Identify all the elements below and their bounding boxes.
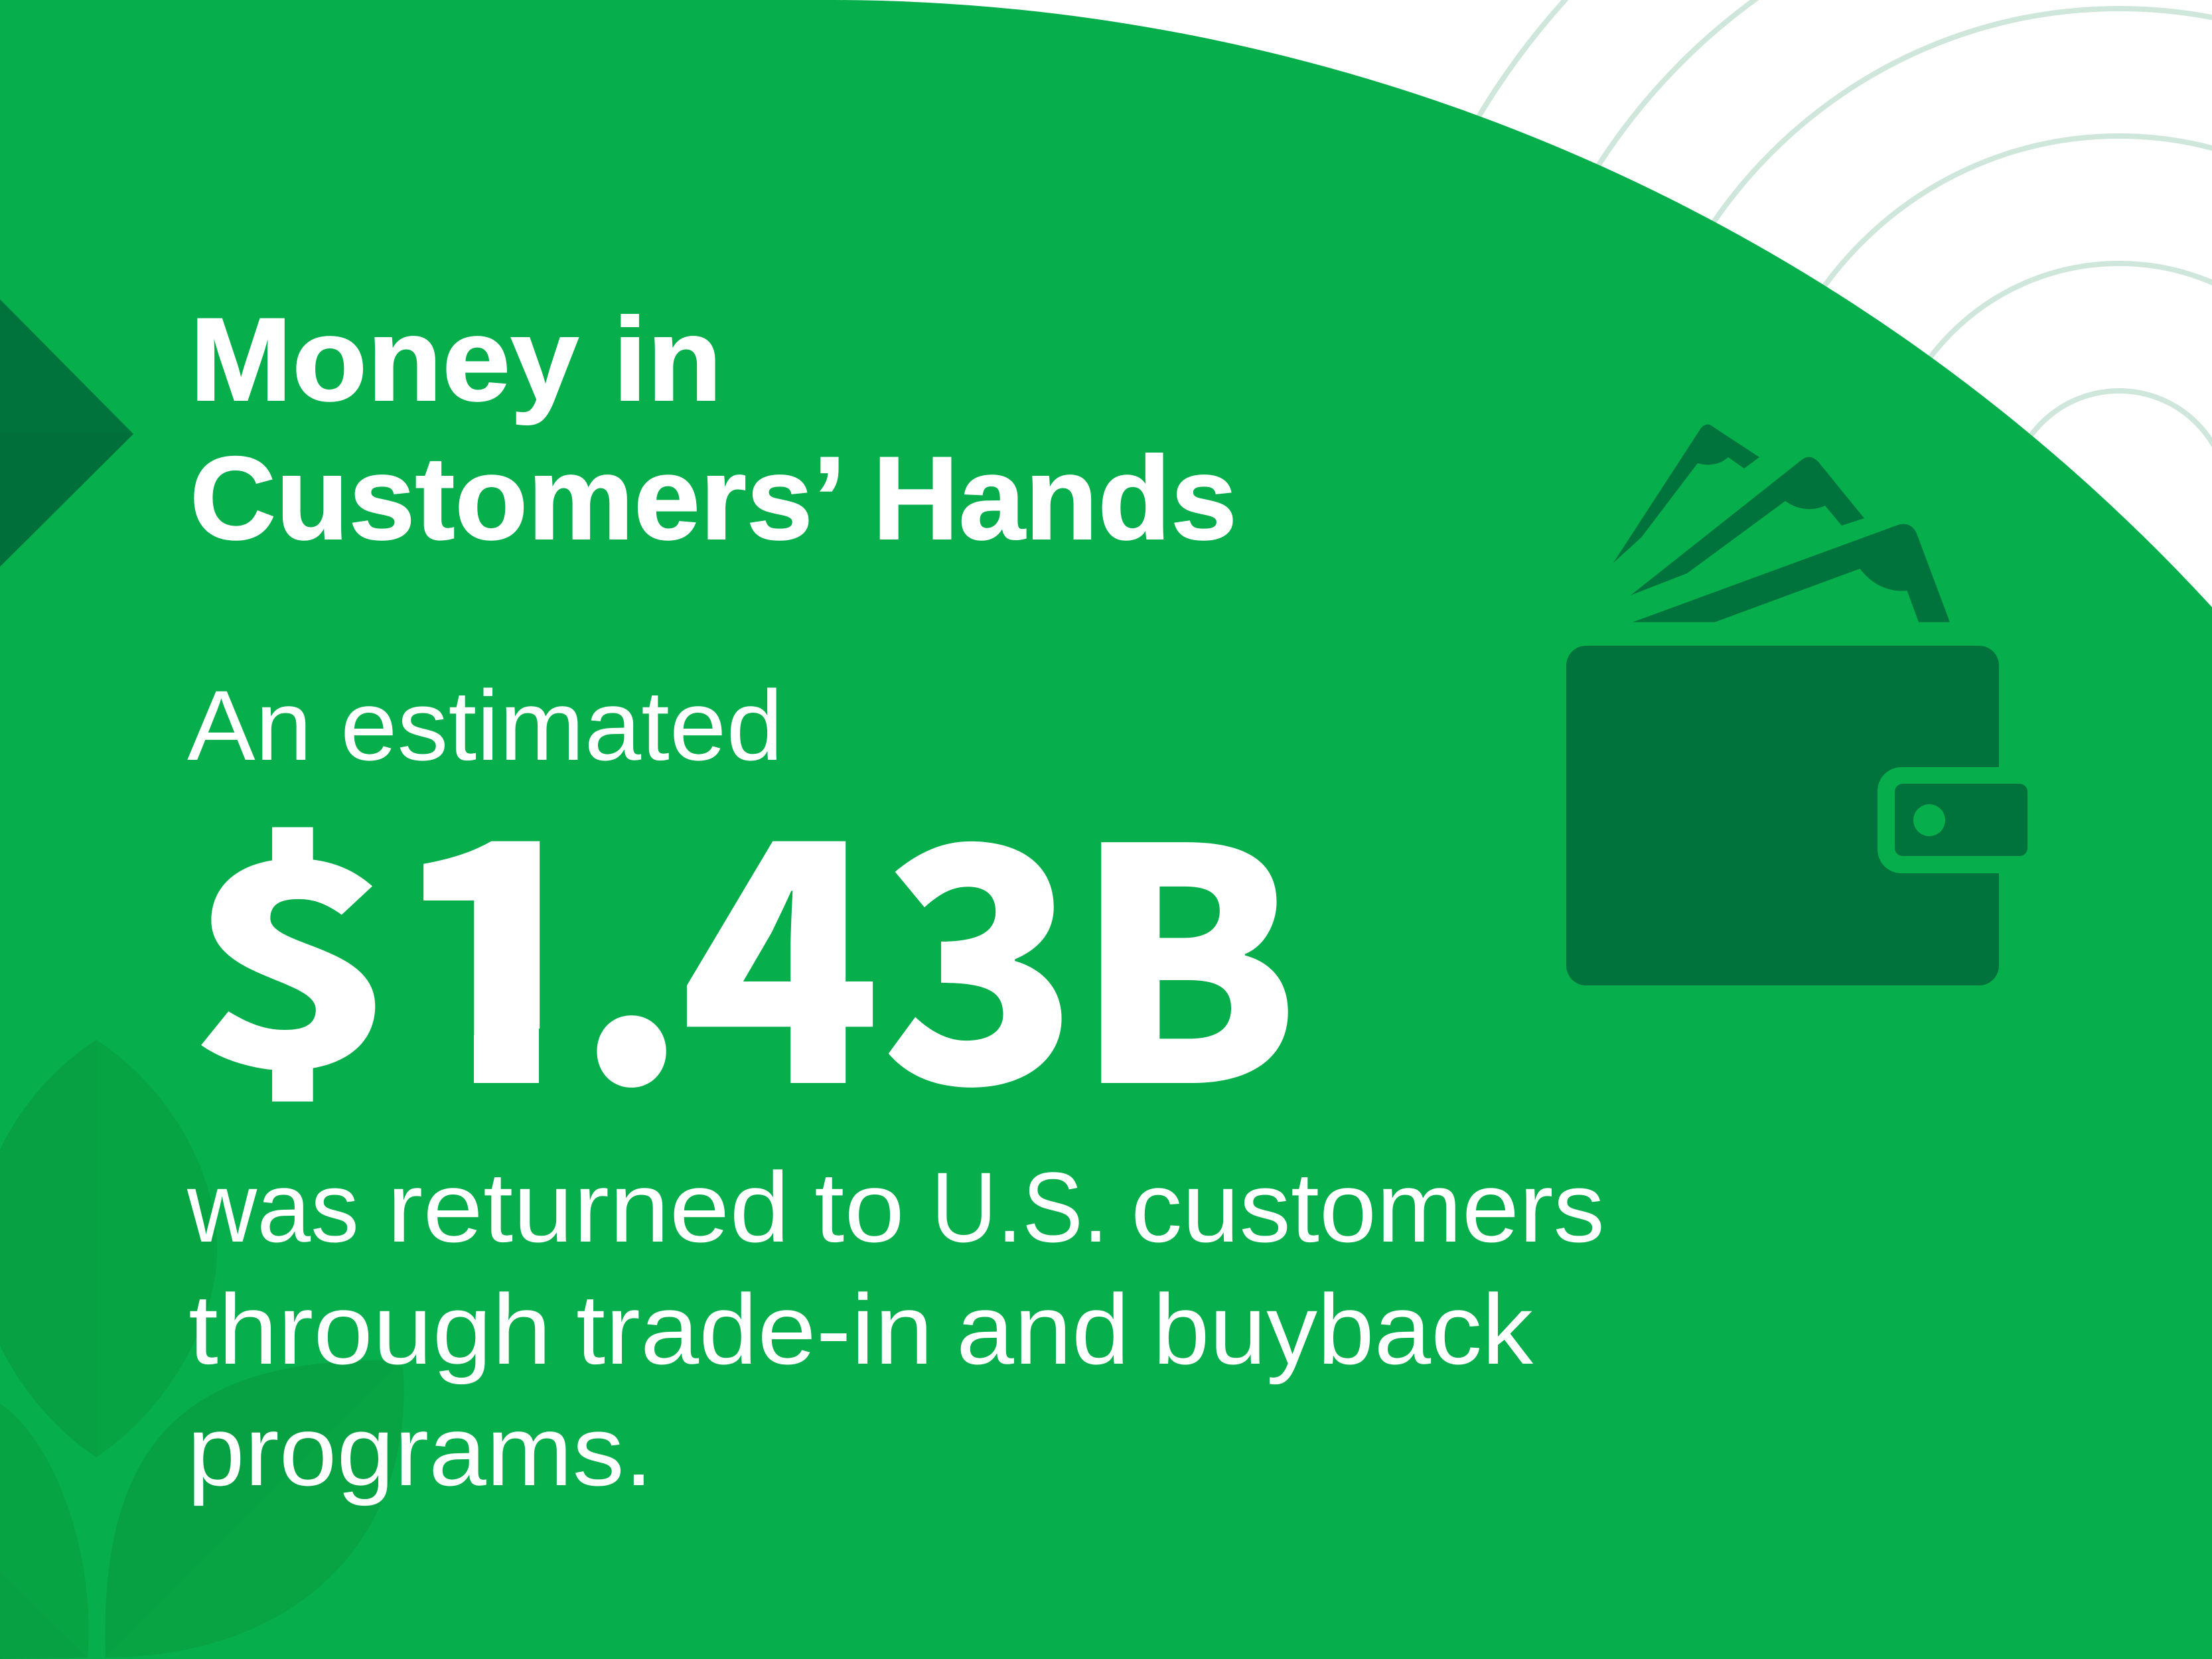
icon: diamond <box>0 299 133 567</box>
icon: wallet with bills <box>1566 424 2028 985</box>
text: description <box>186 1151 1605 1506</box>
text: description: customers <box>1131 1151 1605 1263</box>
big number: . <box>574 704 689 1177</box>
text: intro: An estimated <box>187 670 783 781</box>
text: description: programs. <box>187 1395 653 1506</box>
wallet clasp <box>1895 784 2028 856</box>
text: description: returned <box>387 1151 790 1263</box>
text: description: buyback <box>1153 1273 1534 1385</box>
big number: 4 <box>680 697 881 1179</box>
text: description: and <box>956 1273 1130 1385</box>
big number: 3 <box>881 704 1080 1177</box>
text: description: U.S. <box>931 1151 1108 1263</box>
bill: middle <box>1631 457 1864 595</box>
big number: 1 <box>387 697 612 1179</box>
text: description: through <box>188 1273 552 1385</box>
big number: $ <box>186 741 400 1147</box>
big number: B <box>1073 708 1300 1176</box>
bill: front <box>1633 524 1950 622</box>
big number <box>186 697 1300 1179</box>
heading: Money in <box>190 293 722 425</box>
text: description: to <box>814 1151 905 1263</box>
bill: back <box>1613 424 1759 563</box>
heading: Customers’ Hands <box>190 432 1237 564</box>
text: description: trade-in <box>576 1273 933 1385</box>
wallet body <box>1566 646 1999 985</box>
decoration: leaves <box>0 1040 404 1659</box>
heading <box>190 293 1237 564</box>
text: description: was <box>186 1151 359 1263</box>
